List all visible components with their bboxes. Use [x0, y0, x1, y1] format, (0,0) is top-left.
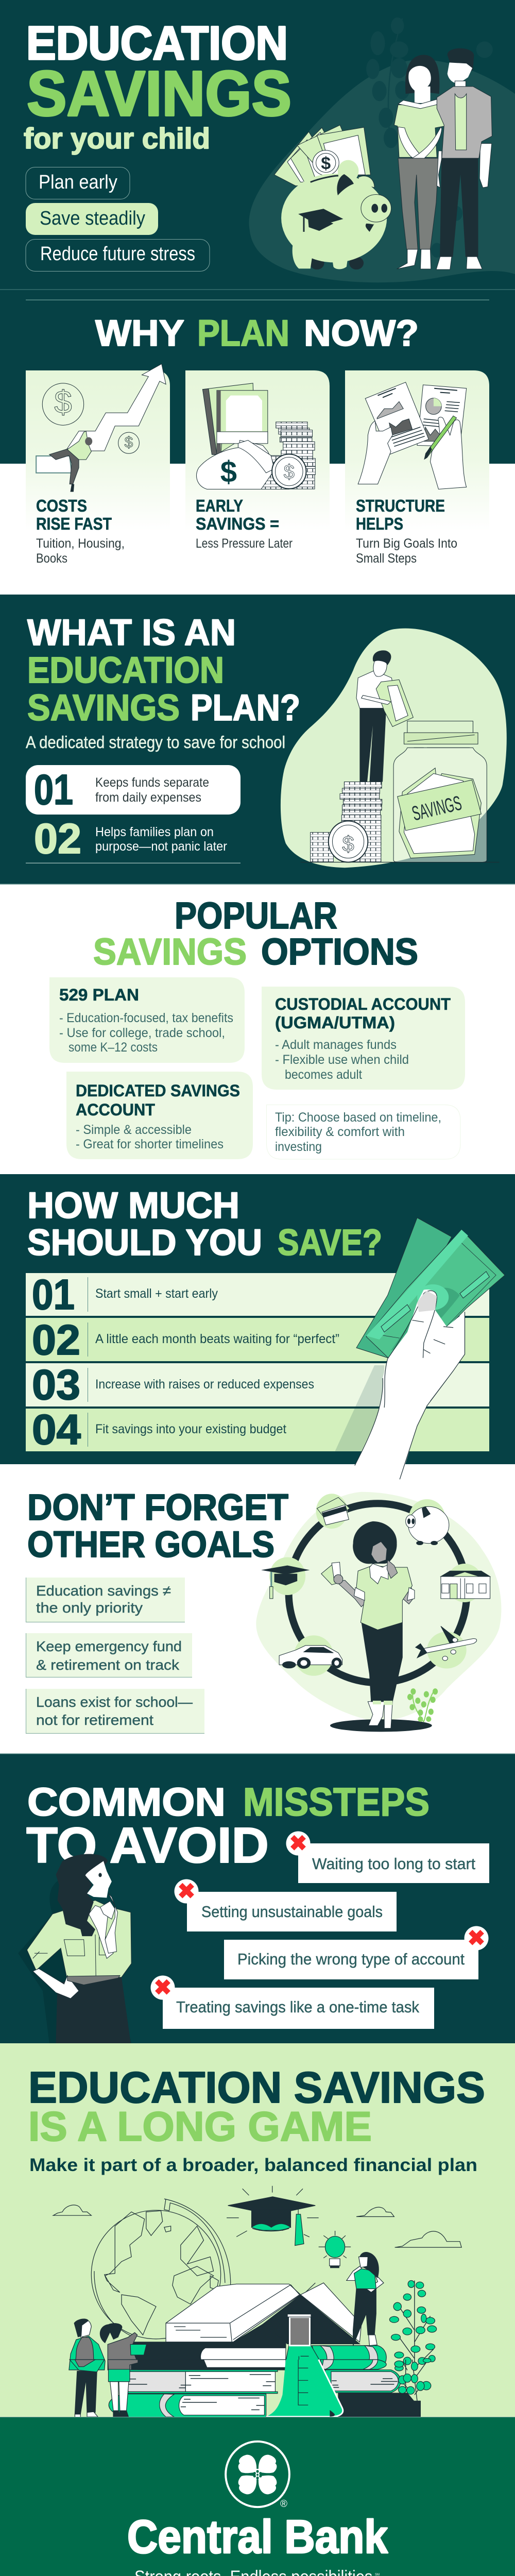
icon: climbing arrow: $ — [54, 385, 72, 420]
step 01 — [26, 1270, 489, 1318]
jar — [393, 748, 487, 862]
callout: emergency fund: Keep emergency fund — [36, 1638, 182, 1654]
step 03: 03 — [32, 1361, 80, 1409]
misstep: unsustainable goals — [174, 1879, 397, 1931]
rays and cap — [227, 2186, 319, 2237]
step 01: 01 — [32, 1270, 75, 1318]
subheading: Make it part of a broader, balanced financial plan — [29, 2155, 477, 2175]
panel: popular savings options — [0, 884, 515, 1174]
card: 529 plan: 529 PLAN — [59, 986, 139, 1004]
pig — [310, 257, 324, 269]
piggy — [406, 1506, 449, 1545]
card: custodial account: becomes adult — [285, 1067, 362, 1082]
coin stacks — [311, 782, 382, 862]
icon: hands holding charts — [358, 382, 467, 489]
hero title: EDUCATION — [26, 17, 288, 70]
money in hand — [321, 1562, 343, 1585]
hero illustration: family with piggy bank — [249, 18, 515, 282]
shadow, plant — [330, 1719, 432, 1732]
misstep: waiting too long: Waiting too long to start — [312, 1855, 475, 1873]
pill: plan early: Plan early — [39, 172, 117, 193]
woman — [337, 1564, 415, 1728]
card: dedicated savings account: DEDICATED SAVINGS — [76, 1081, 240, 1100]
panel: how much should you save — [0, 1174, 515, 1464]
callout: education savings: Education savings ≠ — [36, 1583, 171, 1599]
heading: education savings is a long game: IS A LONG GAME — [28, 2104, 372, 2150]
grad cap — [261, 1566, 310, 1574]
heading: what is an education savings plan — [27, 613, 300, 728]
icon: red x: ✖ — [153, 1975, 172, 1999]
bills — [274, 125, 370, 186]
callout: education savings — [26, 1578, 185, 1622]
step 01: Start small + start early — [95, 1286, 218, 1301]
heading: why plan now: PLAN — [197, 313, 289, 354]
card: costs rise fast: Tuition, Housing, — [36, 536, 125, 551]
icon: red x: ✖ — [289, 1831, 307, 1855]
item 01: from daily expenses — [95, 790, 201, 805]
globe — [164, 2199, 231, 2292]
item 01: 01 — [34, 766, 73, 814]
heading: why plan now: WHY — [95, 313, 184, 354]
card: custodial account: CUSTODIAL ACCOUNT — [275, 995, 451, 1013]
misstep: one-time task — [150, 1975, 434, 2029]
icon: money bag and coins — [196, 383, 315, 489]
heading: common missteps to avoid — [26, 1780, 430, 1873]
panel: hero — [0, 0, 515, 464]
heading: how much should you save: HOW MUCH — [27, 1185, 239, 1226]
card: 529 plan — [49, 977, 245, 1063]
card: structure helps: STRUCTURE — [356, 496, 445, 515]
card: custodial account: - Adult manages funds — [275, 1038, 397, 1052]
student two — [108, 2332, 138, 2370]
pill: reduce future stress: Reduce future stress — [40, 243, 195, 265]
subheading: A dedicated strategy to save for school — [26, 733, 285, 752]
logo: central bank flower — [226, 2442, 289, 2510]
illustration: hand holding cash — [335, 1218, 505, 1479]
dark stack, white book, flask, green book — [131, 2342, 286, 2370]
illustration: man filling savings jar: $ — [342, 832, 354, 856]
illustration: book stack base — [70, 2359, 431, 2418]
item 01: Keeps funds separate — [95, 775, 209, 790]
step 04: Fit savings into your existing budget — [95, 1422, 286, 1436]
panel: don't forget other goals — [0, 1464, 515, 1754]
heading: common missteps to avoid: COMMON — [27, 1780, 226, 1824]
heading: what is an education savings plan: PLAN? — [191, 688, 300, 728]
icon: climbing arrow: $ — [125, 434, 133, 451]
card: 529 plan: - Use for college, trade school, — [59, 1026, 225, 1040]
open book — [166, 2283, 362, 2342]
heading: how much should you save: SAVE? — [278, 1223, 382, 1263]
pill: save steadily: Save steadily — [40, 208, 145, 229]
panel: long game — [0, 2043, 515, 2418]
icon: money bag and coins: $ — [284, 462, 295, 483]
wordmark: Central Bank — [127, 2511, 388, 2563]
man — [359, 707, 386, 782]
callout: emergency fund: & retirement on track — [36, 1657, 180, 1673]
misstep: wrong account — [224, 1926, 488, 1979]
heading: how much should you save — [27, 1185, 382, 1263]
card: structure helps: HELPS — [356, 514, 403, 533]
heading: education savings is a long game — [28, 2063, 485, 2150]
card: custodial account — [262, 987, 465, 1090]
card: 529 plan: some K–12 costs — [68, 1040, 158, 1055]
card: custodial account: (UGMA/UTMA) — [275, 1013, 395, 1032]
card: costs rise fast: COSTS — [36, 496, 87, 515]
panel: common missteps — [0, 1754, 515, 2043]
heading: don't forget other goals — [27, 1487, 288, 1565]
card: early savings — [185, 370, 330, 551]
card: structure helps — [345, 370, 489, 566]
heading: don't forget other goals: DON’T FORGET — [27, 1487, 288, 1528]
step 02: A little each month beats waiting for “perfect” — [95, 1332, 339, 1346]
cap on pig — [298, 209, 344, 226]
step 02 — [26, 1316, 489, 1364]
plane — [416, 1626, 477, 1660]
panel: footer — [0, 2417, 515, 2576]
heading: popular savings options: POPULAR — [175, 895, 337, 937]
credit card — [317, 1497, 350, 1525]
panel: why plan now — [0, 313, 515, 595]
card: early savings: EARLY — [196, 496, 243, 515]
logo: central bank flower: ® — [280, 2499, 287, 2510]
coin — [313, 150, 339, 175]
callout: loans: not for retirement — [36, 1712, 153, 1728]
heading: what is an education savings plan: SAVINGS — [27, 688, 180, 728]
card: dedicated savings account — [66, 1072, 253, 1159]
misstep: wrong account: Picking the wrong type of account — [237, 1950, 465, 1968]
card: structure helps: Turn Big Goals Into — [356, 536, 457, 551]
callout: emergency fund — [26, 1633, 192, 1677]
pill: plan early — [26, 167, 130, 199]
lightbulb — [325, 2236, 345, 2258]
hero title — [24, 17, 291, 155]
standing woman — [353, 2289, 376, 2346]
hero title: for your child — [24, 122, 210, 155]
heading: popular savings options — [93, 895, 418, 973]
illustration: thoughtful woman — [18, 1854, 131, 2043]
heading: common missteps to avoid: MISSTEPS — [243, 1780, 430, 1824]
card: dedicated savings account: - Great for shorter timelines — [76, 1137, 224, 1151]
item 02: Helps families plan on — [95, 825, 214, 839]
card: dedicated savings account: - Simple & accessible — [76, 1123, 192, 1137]
item 02: purpose—not panic later — [95, 839, 227, 854]
item 02 — [34, 815, 227, 862]
icon: red x: ✖ — [467, 1926, 486, 1950]
card: costs rise fast: RISE FAST — [36, 514, 112, 533]
pill: reduce future stress — [26, 239, 210, 271]
step 03 — [26, 1361, 489, 1409]
heading: popular savings options: SAVINGS — [93, 931, 247, 973]
house — [441, 1571, 490, 1599]
card: costs rise fast — [26, 364, 170, 566]
heading: what is an education savings plan: WHAT IS AN — [27, 613, 236, 653]
student one — [69, 2336, 105, 2370]
heading: popular savings options: OPTIONS — [261, 931, 418, 973]
misstep: waiting too long — [286, 1831, 489, 1883]
heading: common missteps to avoid: TO AVOID — [26, 1817, 269, 1873]
card: dedicated savings account: ACCOUNT — [76, 1100, 155, 1119]
illustration: woman and financial goals ring — [256, 1492, 501, 1732]
item 02: 02 — [34, 815, 81, 862]
hero title: SAVINGS — [27, 59, 291, 129]
icon: money bag and coins: $ — [220, 455, 237, 489]
hero illustration: family with piggy bank: $ — [321, 154, 331, 174]
card: tip: Tip: Choose based on timeline, — [275, 1110, 441, 1125]
callout: loans: Loans exist for school— — [36, 1694, 193, 1710]
card: early savings: Less Pressure Later — [196, 536, 293, 551]
money in jar — [399, 768, 481, 858]
heading: how much should you save: SHOULD YOU — [27, 1223, 262, 1263]
card: custodial account: - Flexible use when child — [275, 1053, 409, 1067]
illustration: man filling savings jar: SAVINGS — [409, 792, 464, 825]
heading: what is an education savings plan: EDUCATION — [27, 650, 224, 691]
heading: education savings is a long game: EDUCATION SAVINGS — [28, 2063, 485, 2112]
heading: why plan now: NOW? — [304, 313, 419, 354]
heading: why plan now — [95, 313, 419, 354]
illustration: globe, books and students — [53, 2186, 461, 2371]
illustration: man filling savings jar — [281, 629, 507, 868]
card: tip: flexibility & comfort with — [275, 1125, 405, 1139]
card: early savings: SAVINGS = — [196, 514, 279, 533]
car — [279, 1646, 342, 1669]
item 01 — [26, 765, 241, 815]
icon: climbing arrow — [36, 364, 166, 492]
card: tip — [267, 1105, 460, 1159]
man — [448, 48, 474, 74]
card: 529 plan: - Education-focused, tax benefits — [59, 1011, 233, 1025]
pill: save steadily — [26, 203, 158, 235]
plant — [398, 2280, 434, 2370]
icon: red x: ✖ — [177, 1879, 196, 1903]
callout: education savings: the only priority — [36, 1600, 143, 1616]
misstep: one-time task: Treating savings like a one-time task — [176, 1998, 419, 2016]
callout: loans — [26, 1689, 204, 1734]
misstep: unsustainable goals: Setting unsustainable goals — [201, 1903, 383, 1921]
card: structure helps: Small Steps — [356, 551, 417, 566]
step 04: 04 — [32, 1405, 81, 1453]
woman — [405, 55, 439, 94]
panel: what is an education savings plan — [0, 595, 515, 884]
card: tip: investing — [275, 1140, 322, 1154]
clouds — [53, 2205, 461, 2247]
step 03: Increase with raises or reduced expenses — [95, 1377, 314, 1392]
step 04 — [26, 1405, 489, 1453]
card: costs rise fast: Books — [36, 551, 67, 566]
step 02: 02 — [32, 1316, 80, 1364]
heading: don't forget other goals: OTHER GOALS — [27, 1524, 274, 1565]
